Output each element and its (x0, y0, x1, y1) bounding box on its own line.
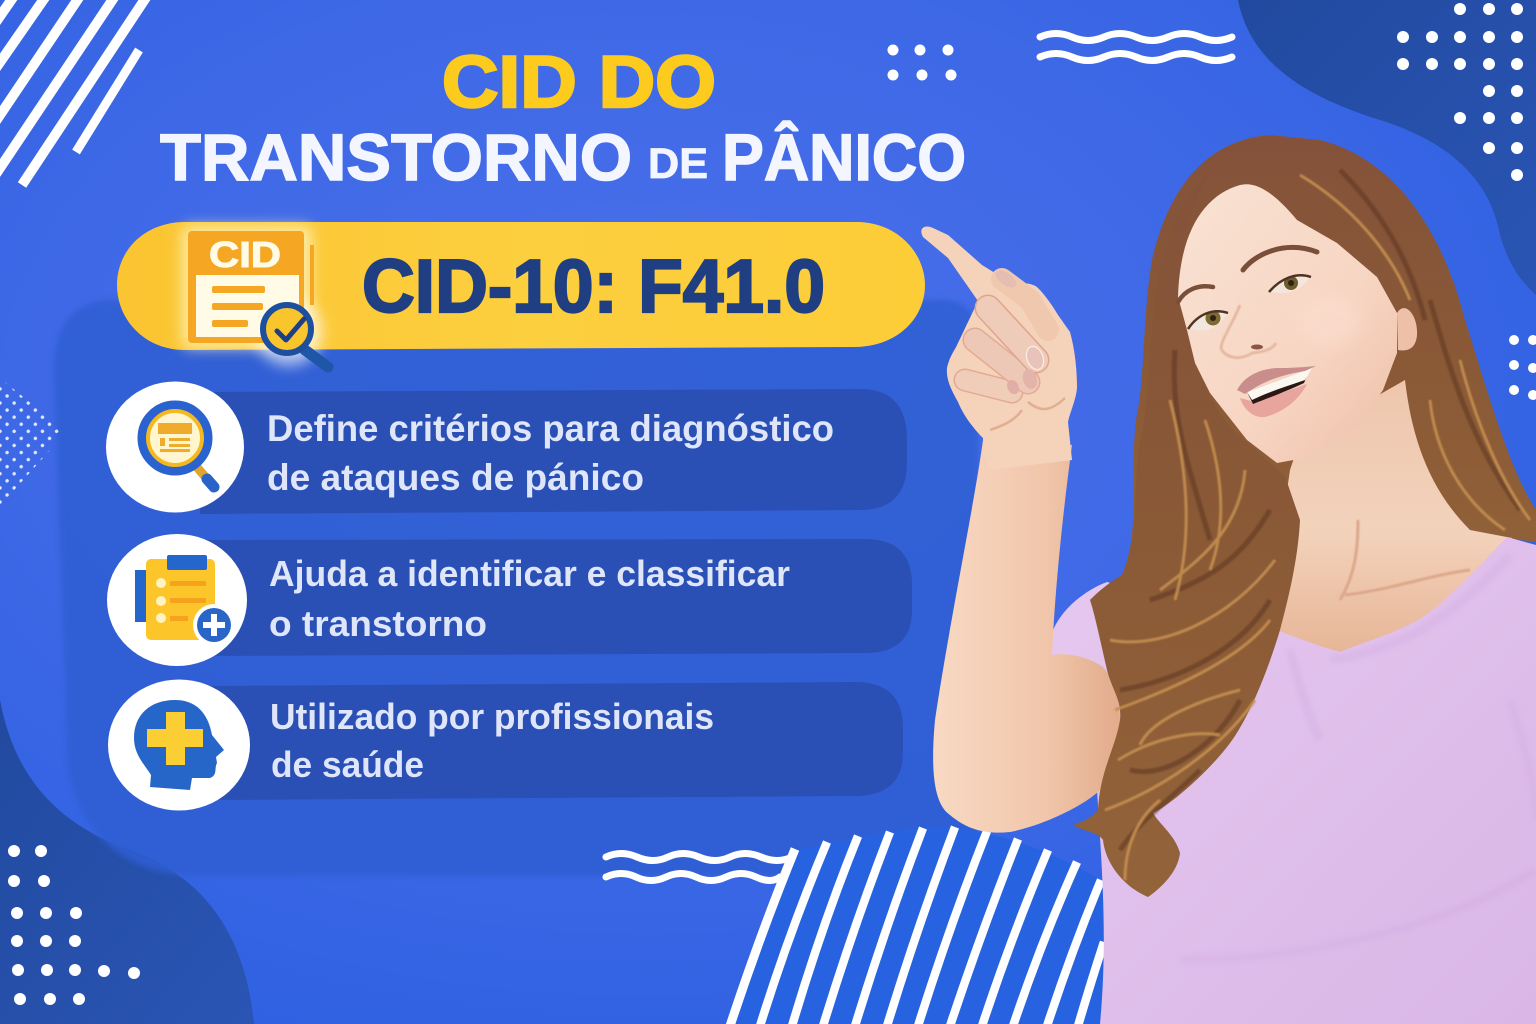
icon: magnifier badge (106, 382, 244, 512)
curled fingers (965, 380, 1012, 392)
hair back (1125, 135, 1536, 600)
icon: CID document with magnifier: CID (209, 234, 281, 275)
shirt shading (1180, 555, 1536, 960)
content backdrop panel (54, 300, 978, 876)
title word: PÂNICO (722, 120, 966, 194)
row 3 text: Utilizado por profissionais (270, 696, 714, 737)
cheek blush (1296, 294, 1360, 346)
hair strands (1105, 170, 1530, 880)
row 3 text (270, 696, 714, 785)
shirt (1052, 537, 1536, 1024)
row 1 text (267, 408, 834, 498)
ear (1397, 308, 1417, 350)
woman pointing (921, 135, 1536, 1024)
nose (1221, 305, 1276, 358)
code text: CID-10: F41.0 (362, 244, 825, 328)
icon: clipboard badge (107, 534, 247, 666)
decorative blob: bottom left (0, 700, 254, 1024)
row 2 text: o transtorno (269, 603, 487, 644)
row 1 text: Define critérios para diagnóstico (267, 408, 834, 449)
hair front left (1073, 165, 1300, 897)
yellow code banner (117, 222, 925, 350)
decoration: dots top right (1397, 3, 1523, 181)
icon: head with cross badge (108, 680, 250, 810)
row 2 text (269, 553, 790, 644)
row 2 pill (200, 539, 912, 656)
decoration: top-left stripes (0, 0, 147, 185)
mouth (1237, 366, 1316, 417)
icon: CID document with magnifier (182, 226, 328, 367)
decoration: dots bottom left (8, 845, 140, 1005)
row 1 text: de ataques de pánico (267, 457, 644, 498)
decoration: waves top right (1040, 34, 1232, 60)
nails (1023, 344, 1047, 372)
banner pill (117, 222, 925, 350)
decoration: bottom stripes (730, 827, 1104, 1024)
row 3 text: de saúde (271, 744, 424, 785)
decoration: dots top center (888, 44, 956, 80)
row 1 pill (200, 389, 907, 514)
arm (933, 440, 1120, 833)
decoration: waves bottom (606, 854, 792, 880)
decoration: halftone dots left (0, 378, 66, 506)
wrist creases (990, 398, 1065, 430)
decoration: dots right of hair (1509, 335, 1536, 400)
thumb (1002, 279, 1048, 330)
row 3 pill (205, 682, 903, 800)
row 2 text: Ajuda a identificar e classificar (269, 553, 790, 594)
title line 2: TRANSTORNO (160, 120, 632, 194)
palm and pointing finger (921, 226, 1077, 470)
title (160, 42, 966, 194)
neck and chest (1265, 380, 1512, 655)
face (1178, 184, 1397, 463)
title small word: DE (648, 140, 708, 188)
eyes and brows (1178, 247, 1317, 331)
hand (921, 226, 1077, 470)
decorative blob: top right (1238, 0, 1536, 295)
neck fold lines (1340, 520, 1470, 600)
title line 1: CID DO (442, 42, 716, 123)
